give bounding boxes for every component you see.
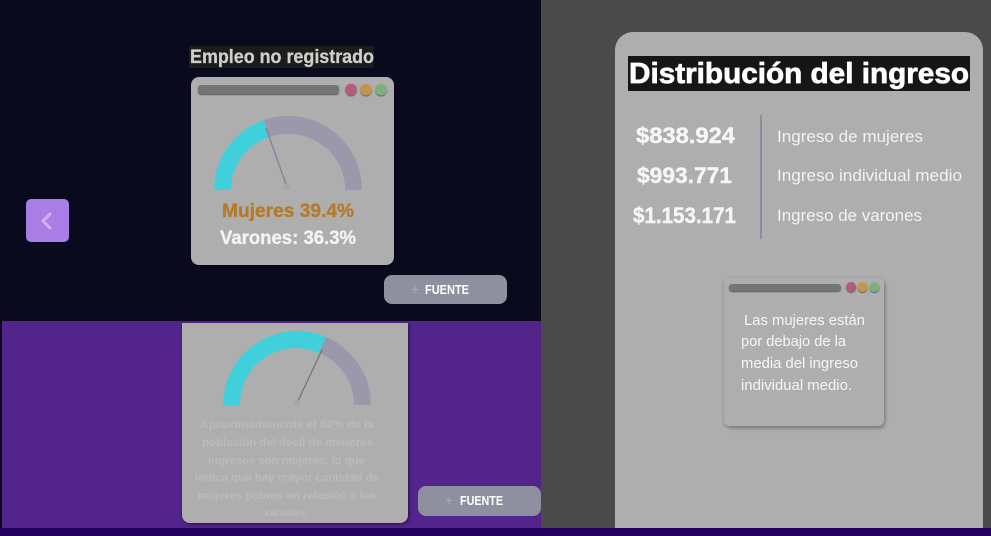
callout text: por debajo de la <box>741 333 847 350</box>
button: fuente bottom: FUENTE <box>460 494 503 508</box>
text: paragraph: población del decil de menores <box>202 437 373 449</box>
amounts: $838.924 <box>636 123 736 148</box>
callout card <box>724 278 884 426</box>
gauge: 62% <box>223 331 371 406</box>
income labels: Ingreso de mujeres <box>777 127 923 146</box>
button: fuente bottom: + <box>445 492 453 508</box>
panel: gauge card empleo <box>191 77 394 265</box>
text: mujeres: Mujeres 39.4% <box>222 201 354 222</box>
panel: gray background <box>541 0 991 528</box>
text: paragraph: Aproximadamente el 62% de la <box>200 419 375 431</box>
window bar <box>729 284 841 291</box>
income labels <box>777 127 962 225</box>
window dots <box>846 282 880 292</box>
bottom strip <box>0 528 991 536</box>
callout text: Las mujeres están <box>744 312 865 329</box>
text: paragraph: mujeres pobres en relación a los <box>198 490 376 502</box>
panel: dark background <box>0 0 541 321</box>
callout text <box>741 312 865 394</box>
button: back arrow <box>26 199 69 242</box>
gauge: mujeres 39.4% <box>214 116 362 190</box>
text: paragraph <box>195 419 379 519</box>
heading: distribución del ingreso: Distribución del ingreso <box>629 58 969 90</box>
heading: empleo no registrado: Empleo no registrado <box>190 47 374 68</box>
income labels: Ingreso individual medio <box>777 166 962 185</box>
amounts: $1.153.171 <box>633 203 736 228</box>
button: fuente top: + <box>411 281 419 297</box>
panel: purple background <box>2 321 541 528</box>
window dots <box>345 84 387 95</box>
panel: gauge card pobreza <box>182 323 408 523</box>
callout text: media del ingreso <box>741 355 858 372</box>
button: fuente top: FUENTE <box>425 283 469 297</box>
text: paragraph: indica que hay mayor cantidad de <box>195 472 379 484</box>
button: fuente bottom <box>418 486 541 516</box>
text: paragraph: ingresos son mujeres, lo que <box>208 455 365 467</box>
panel: distribución del ingreso <box>615 32 983 528</box>
amounts <box>633 123 736 228</box>
text: paragraph: varones. <box>264 507 308 519</box>
income labels: Ingreso de varones <box>777 206 922 225</box>
amounts: $993.771 <box>637 163 732 188</box>
text: varones: Varones: 36.3% <box>220 228 356 249</box>
button: fuente top <box>384 275 507 304</box>
divider <box>760 115 762 239</box>
window bar <box>198 85 339 94</box>
callout text: individual medio. <box>741 377 852 394</box>
